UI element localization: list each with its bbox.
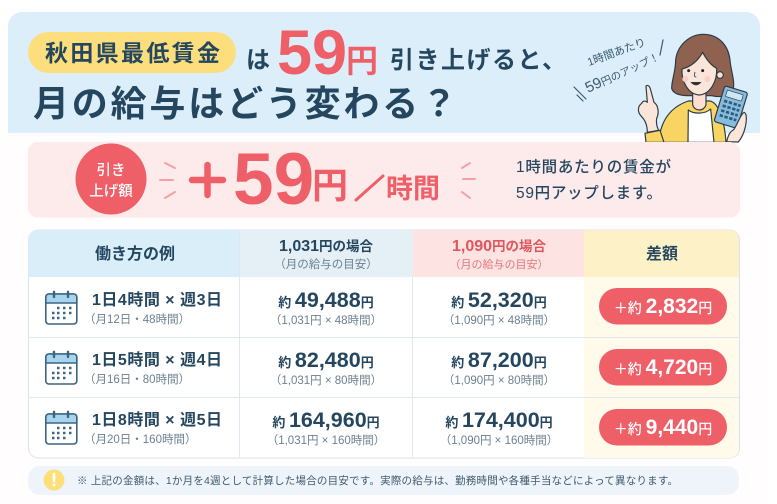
pointing hand — [638, 85, 659, 132]
row 2: 1日5時間 × 週4日 — [92, 351, 222, 369]
title line 1: 円 — [346, 43, 378, 79]
row 3: （月20日・160時間） — [84, 433, 196, 446]
row 2: （1,090円 × 80時間） — [443, 374, 555, 387]
row 1 — [46, 288, 727, 327]
table header row: （月の給与の目安） — [450, 258, 548, 271]
table header row: （月の給与の目安） — [274, 258, 378, 271]
title line 2: 月の給与はどう変わる？ — [33, 83, 457, 124]
holding hand — [727, 112, 746, 142]
burst lines right — [462, 163, 475, 198]
badge: difference — [599, 288, 727, 324]
row 1: 1日4時間 × 週3日 — [92, 291, 222, 309]
row 3: 約 164,960円 — [272, 408, 380, 432]
neck — [693, 90, 706, 110]
footnote bar — [28, 466, 739, 495]
comparison table — [28, 230, 740, 458]
speech text: 1時間あたり 59円のアップ — [574, 36, 663, 101]
table header row: 1,090円の場合 — [452, 238, 547, 255]
row 1: （1,090円 × 48時間） — [443, 314, 555, 327]
badge: 引き上げ額: 上げ額 — [89, 183, 133, 200]
row 3: 約 174,400円 — [445, 408, 553, 432]
row 3: （1,031円 × 160時間） — [267, 434, 385, 447]
highlighted pill: 秋田県最低賃金 — [28, 32, 236, 73]
speech text: 1時間あたり 59円のアップ: 1時間あたり — [586, 36, 647, 69]
shirt — [688, 109, 714, 142]
explanation text: 1時間あたりの賃金が — [516, 157, 671, 176]
page background panel — [8, 120, 760, 504]
row 1: 約 49,488円 — [278, 288, 374, 312]
explanation text: 59円アップします。 — [516, 184, 662, 202]
badge: difference: ＋約 4,720円 — [614, 356, 712, 379]
illustration: woman with calculator — [638, 34, 748, 142]
badge: difference: ＋約 2,832円 — [614, 295, 712, 318]
badge: difference — [599, 349, 727, 386]
title line 1: 59 — [277, 18, 347, 88]
speech text: 1時間あたり 59円のアップ: 59円のアップ！ — [583, 48, 662, 97]
hair — [672, 34, 734, 97]
banner: raise amount — [28, 139, 740, 220]
sleeve — [645, 130, 664, 142]
title line 1 — [246, 18, 566, 88]
icon: calendar — [46, 292, 77, 324]
big amount: 円 — [312, 165, 348, 206]
badge: 引き上げ額 — [76, 144, 146, 214]
explanation text — [516, 157, 671, 202]
icon: calendar — [46, 352, 77, 384]
face — [682, 52, 717, 95]
big amount: 59 — [233, 139, 314, 220]
row 3 — [46, 408, 727, 447]
table header row: 働き方の例 — [95, 244, 175, 263]
title line 1: は — [246, 47, 270, 74]
icon: calendar — [46, 412, 77, 444]
row 2: 約 87,200円 — [451, 348, 547, 372]
table header row — [28, 230, 739, 277]
highlighted pill: 秋田県最低賃金: 秋田県最低賃金 — [45, 40, 220, 66]
table header row: 1,031円の場合 — [279, 238, 374, 255]
row 3: 1日8時間 × 週5日 — [92, 411, 222, 429]
icon: warning — [44, 470, 64, 490]
burst lines left — [160, 163, 175, 198]
grid lines — [28, 230, 739, 458]
title line 1: 引き上げると、 — [390, 47, 566, 74]
row 1: 約 52,320円 — [451, 288, 547, 312]
calculator — [714, 86, 748, 128]
row 2: （1,031円 × 80時間） — [270, 374, 382, 387]
difference column background — [584, 277, 739, 458]
header panel — [8, 12, 760, 142]
jacket — [659, 101, 726, 142]
row 2: 約 82,480円 — [278, 348, 374, 372]
row 1: （1,031円 × 48時間） — [270, 314, 382, 327]
row 2 — [46, 348, 727, 387]
row 3: （1,090円 × 160時間） — [440, 434, 558, 447]
big amount: 時間 — [386, 174, 440, 204]
badge: difference — [599, 409, 727, 446]
big amount — [192, 139, 440, 220]
table base — [28, 230, 740, 458]
footnote bar: ※ 上記の金額は、1か月を4週として計算した場合の目安です。実際の給与は、勤務時間や各種手当などによって異なります。 — [77, 474, 678, 487]
row 1: （月12日・48時間） — [84, 313, 190, 326]
row 2: （月16日・80時間） — [84, 373, 190, 386]
badge: 引き上げ額: 引き — [96, 162, 126, 179]
table header row: 差額 — [646, 244, 678, 263]
badge: difference: ＋約 9,440円 — [614, 416, 712, 439]
